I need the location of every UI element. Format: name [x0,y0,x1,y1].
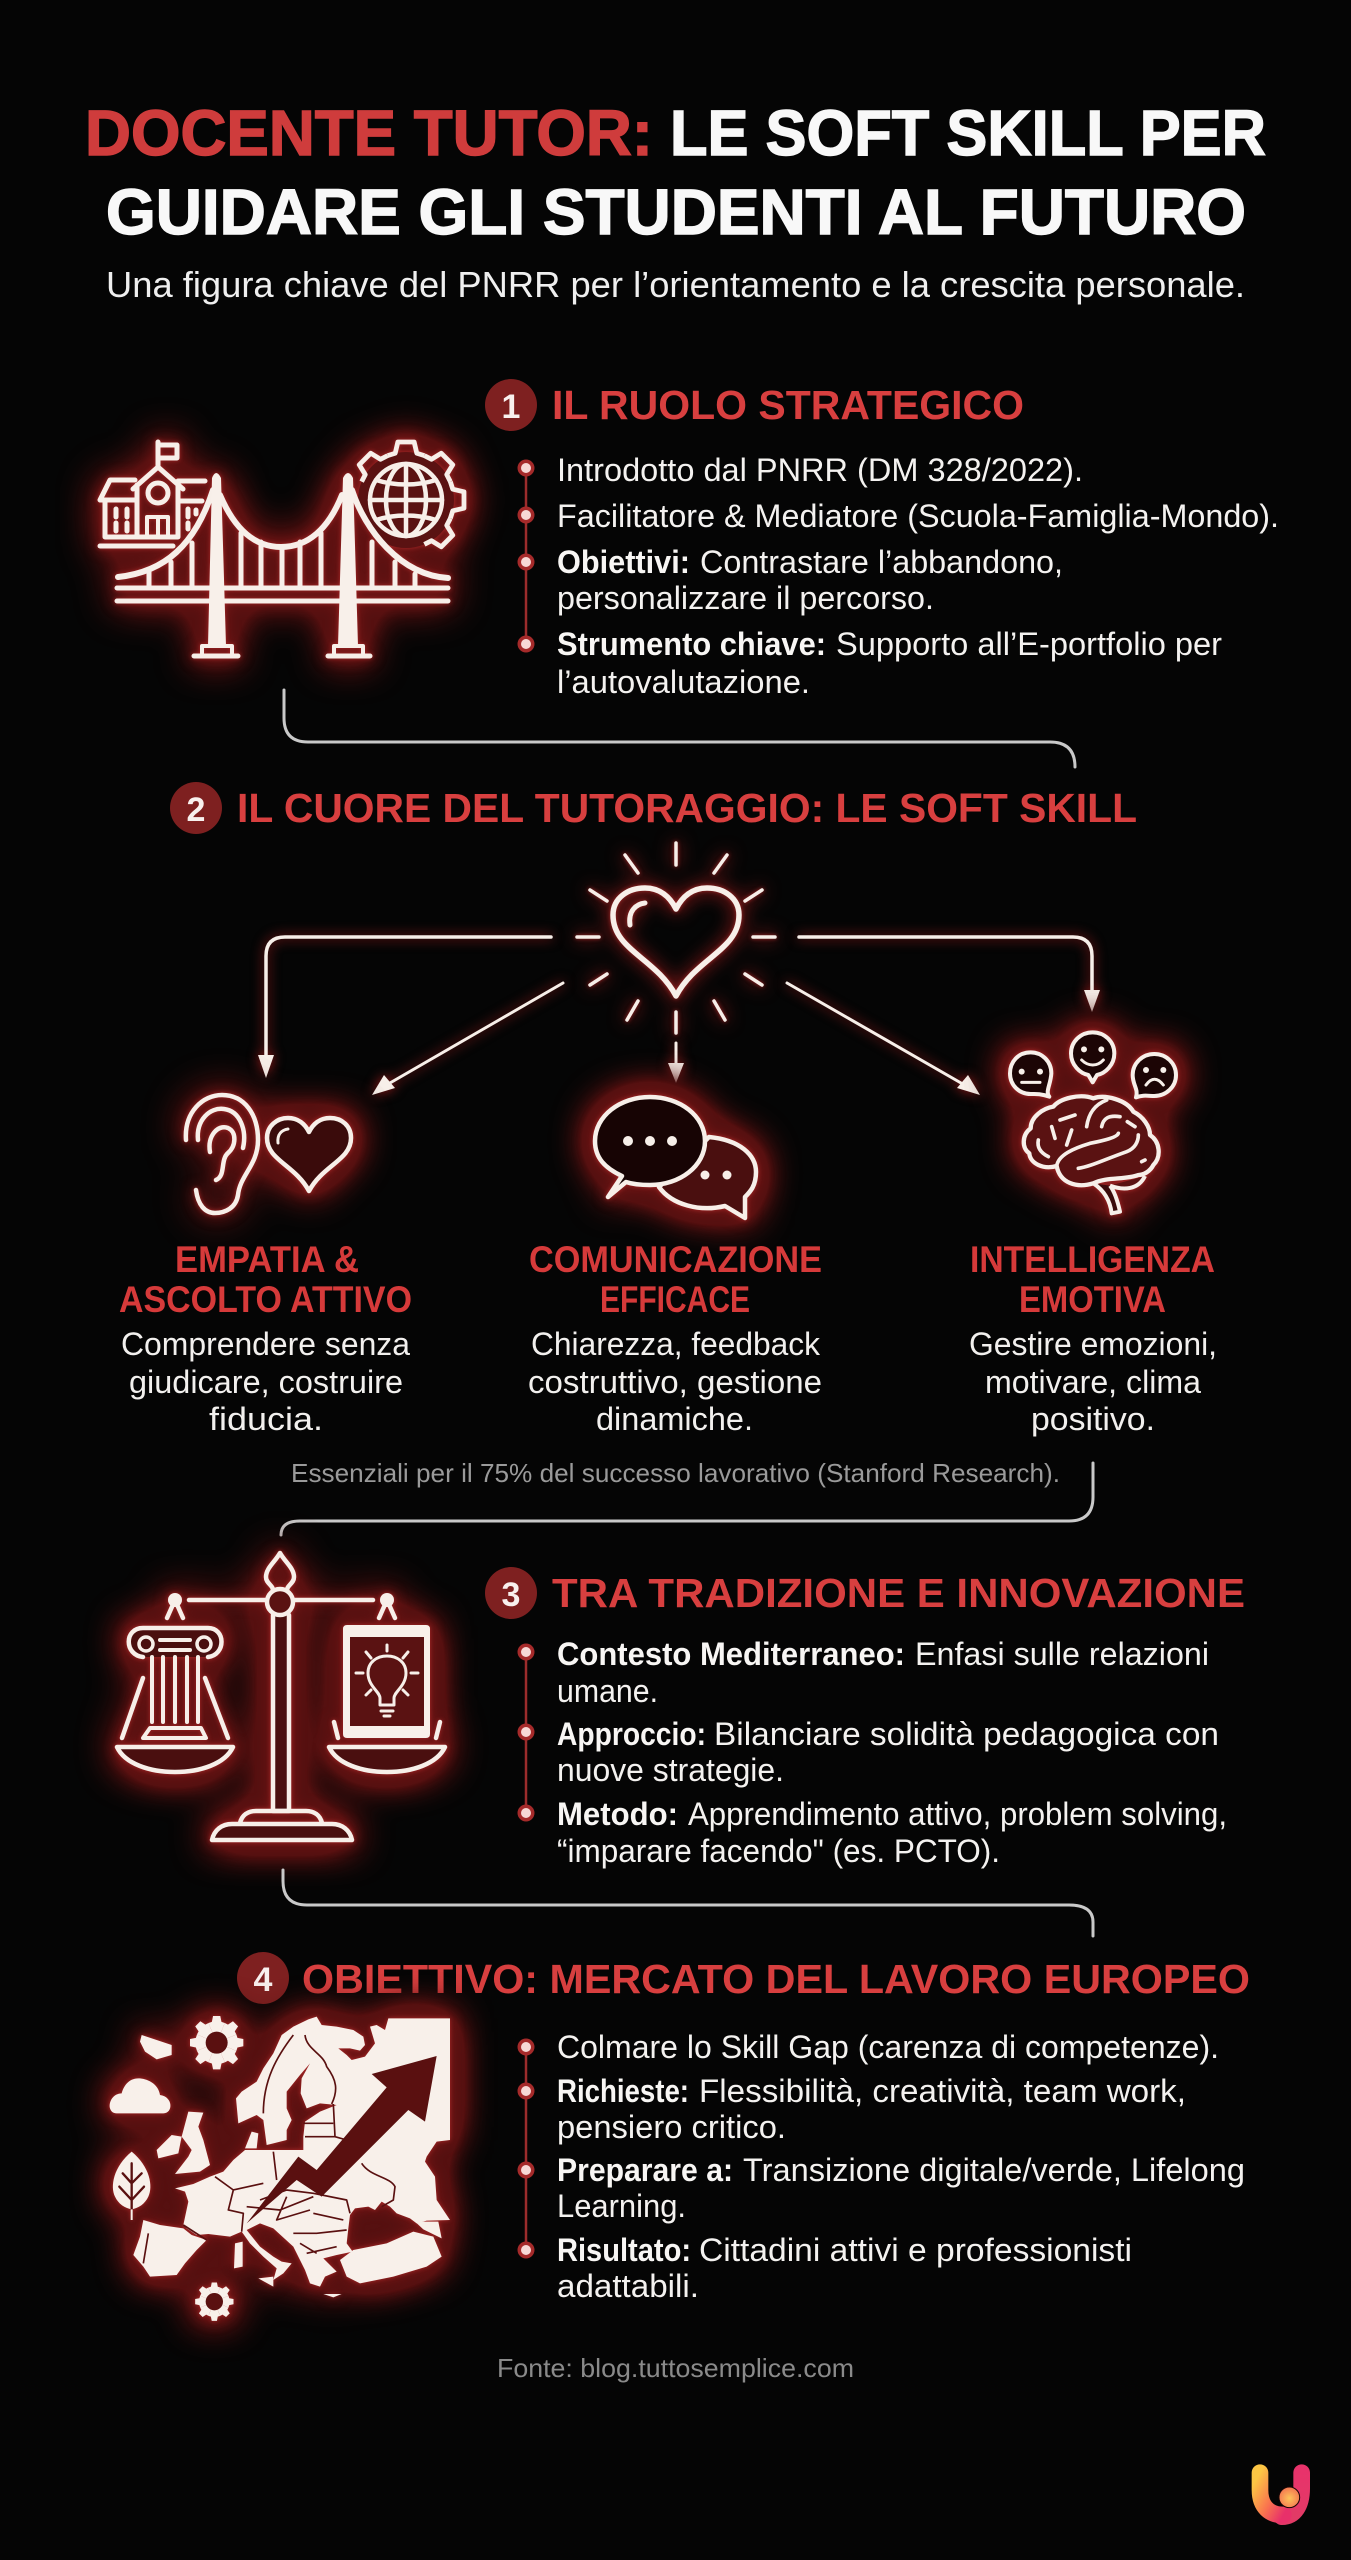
skill: empatia: ASCOLTO ATTIVO [119,1279,412,1320]
section 1 bullets: Contrastare l’abbandono, [700,544,1063,580]
skill: empatia: Comprendere senza [121,1326,410,1362]
section 3 bullets: umane. [557,1673,658,1709]
skill: empatia [119,1239,412,1437]
section 3 bullets [518,1636,1227,1869]
section 1 bullets: Introdotto dal PNRR (DM 328/2022). [557,452,1083,488]
skill: intelligenza emotiva [969,1239,1217,1437]
icon: ear and heart [186,1095,351,1213]
section 3 bullets: Bilanciare solidità pedagogica con [714,1716,1219,1752]
gear and globe [358,452,454,548]
section 4 bullets [518,2029,1245,2304]
subtitle: Una figura chiave del PNRR per l’orientamento e la crescita personale. [106,264,1245,305]
section 3 heading: TRA TRADIZIONE E INNOVAZIONE [552,1570,1245,1616]
skill: empatia: EMPATIA & [175,1239,359,1280]
borders [143,2035,395,2263]
skill: intelligenza emotiva: positivo. [1031,1401,1155,1437]
skill: intelligenza emotiva: EMOTIVA [1019,1279,1166,1320]
section 4 bullets: Learning. [557,2188,686,2224]
section 3 bullets: Contesto Mediterraneo: [557,1636,905,1672]
skill: empatia: fiducia. [209,1401,323,1437]
skill: comunicazione [528,1239,822,1437]
section 3 bullets: Approccio: [557,1716,706,1752]
section 4 bullets: Transizione digitale/verde, Lifelong [743,2152,1245,2188]
section 3 bullets: Apprendimento attivo, problem solving, [688,1796,1227,1832]
arrows from heart to skills [258,937,1100,1095]
section 3 bullets: Metodo: [557,1796,678,1832]
logo [1260,2473,1302,2517]
section 3 bullets: nuove strategie. [557,1752,784,1788]
section 3 bullets: Enfasi sulle relazioni [915,1636,1209,1672]
growth arrow [247,2056,437,2223]
section 4 bullets: Preparare a: [557,2152,733,2188]
section 1 bullets: Facilitatore & Mediatore (Scuola-Famiglia-Mondo). [557,498,1279,534]
pans [117,1747,233,1772]
gears [190,2016,243,2321]
section 4 bullets: Flessibilità, creatività, team work, [699,2073,1186,2109]
connector 1 to 2 [284,690,1075,767]
title: LE SOFT SKILL PER [670,97,1266,169]
section 1 bullets: Supporto all’E-portfolio per [836,626,1222,662]
title [85,97,1266,248]
source: Fonte: blog.tuttosemplice.com [497,2353,854,2383]
base [212,1824,352,1840]
column [129,1628,222,1657]
icon: europe map with growth arrow [110,2016,450,2321]
skill: comunicazione: EFFICACE [600,1279,750,1320]
skill: comunicazione: costruttivo, gestione [528,1364,822,1400]
section 4 bullets: Risultato: [557,2232,691,2268]
skill: comunicazione: COMUNICAZIONE [529,1239,822,1280]
bridge [117,490,448,656]
skill: intelligenza emotiva: INTELLIGENZA [970,1239,1215,1280]
icon: brain with emotion faces [1010,1032,1176,1213]
section 1 heading: IL RUOLO STRATEGICO [552,382,1024,428]
icon: speech bubbles [595,1097,756,1218]
icon: central heart with rays [577,843,775,1033]
section 2 heading: IL CUORE DEL TUTORAGGIO: LE SOFT SKILL [237,785,1137,831]
tablet [343,1625,430,1738]
section 1 bullets: l’autovalutazione. [557,664,810,700]
section 4 bullets: pensiero critico. [557,2109,786,2145]
icon: bridge between school and globe gear [100,442,464,656]
section 3 heading: 3 [502,1576,520,1614]
title: DOCENTE TUTOR: [85,97,653,169]
skill: intelligenza emotiva: Gestire emozioni, [969,1326,1217,1362]
section 2 heading: 2 [187,791,205,829]
section 3 bullets: “imparare facendo" (es. PCTO). [557,1833,1000,1869]
skill: comunicazione: dinamiche. [596,1401,753,1437]
section 1 bullets: Obiettivi: [557,544,690,580]
leaf [113,2152,150,2220]
section 1 bullets: personalizzare il percorso. [557,580,934,616]
section 1 bullets: Strumento chiave: [557,626,826,662]
section 4 bullets: Cittadini attivi e professionisti [699,2232,1132,2268]
connector 3 to 4 [283,1870,1093,1936]
skill: empatia: giudicare, costruire [129,1364,403,1400]
note: Essenziali per il 75% del successo lavorativo (Stanford Research). [291,1458,1060,1488]
connector 2 to 3 [281,1463,1093,1535]
skill: intelligenza emotiva: motivare, clima [985,1364,1201,1400]
section 1 heading: 1 [502,388,520,426]
section 4 heading: OBIETTIVO: MERCATO DEL LAVORO EUROPEO [302,1956,1250,2002]
section 1 bullets [518,452,1279,700]
section 4 bullets: adattabili. [557,2268,699,2304]
title: GUIDARE GLI STUDENTI AL FUTURO [106,176,1246,248]
skill: comunicazione: Chiarezza, feedback [531,1326,821,1362]
cloud [110,2078,170,2113]
finial and post [266,1553,294,1592]
icon: balance scale [117,1553,445,1840]
land [133,2017,450,2297]
section 4 bullets: Colmare lo Skill Gap (carenza di competenze). [557,2029,1219,2065]
section 4 heading: 4 [254,1961,273,1999]
section 4 bullets: Richieste: [557,2073,689,2109]
school [100,442,205,546]
